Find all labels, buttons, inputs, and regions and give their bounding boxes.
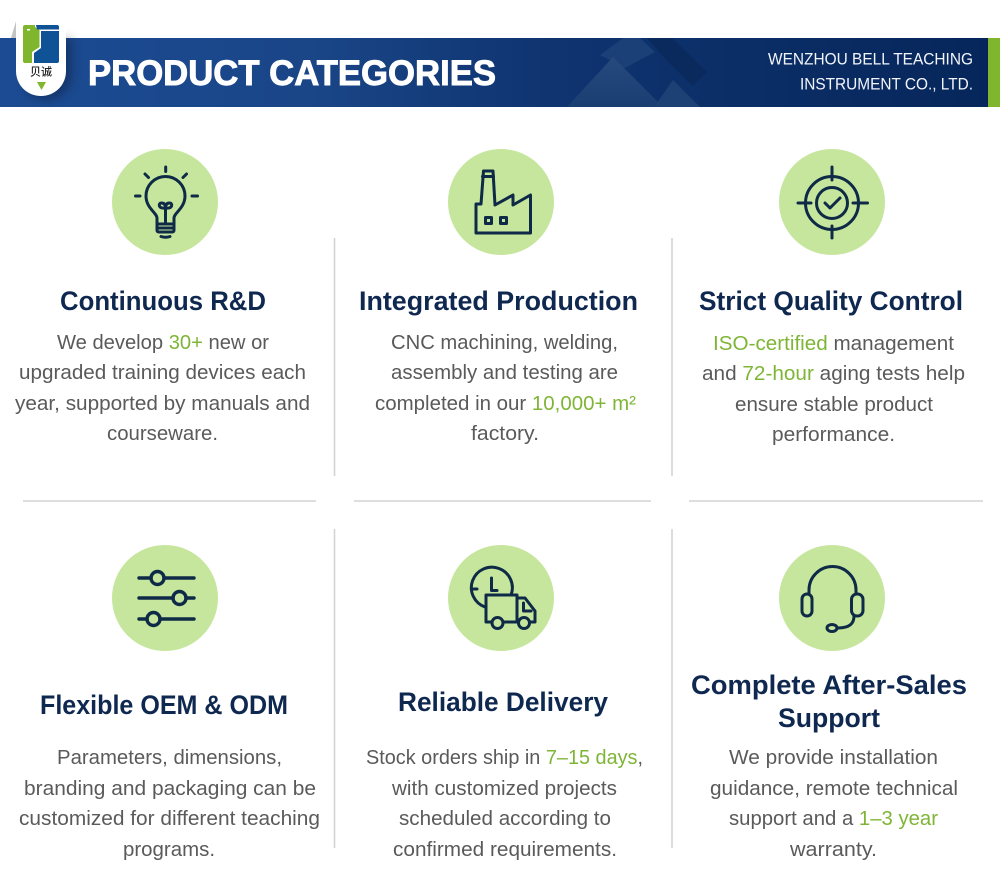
header banner <box>0 38 1000 107</box>
heading: Support <box>778 703 880 733</box>
company name: WENZHOU BELL TEACHING <box>768 50 973 68</box>
heading: Reliable Delivery <box>398 687 608 717</box>
description: programs. <box>123 838 215 861</box>
description <box>15 331 310 445</box>
description: customized for different teaching <box>19 807 320 830</box>
heading: Complete After-Sales <box>691 670 967 700</box>
icon: sliders <box>112 545 218 651</box>
description <box>710 746 958 861</box>
icon: light bulb <box>112 149 218 255</box>
company name <box>768 50 973 94</box>
description: factory. <box>471 422 539 445</box>
accent bar <box>988 38 1000 107</box>
icon: headset <box>779 545 885 651</box>
panel: Continuous R&D <box>15 149 310 445</box>
description: ISO-certified management <box>713 332 954 355</box>
description <box>19 746 320 861</box>
description: confirmed requirements. <box>393 838 617 861</box>
description: courseware. <box>107 422 218 445</box>
description <box>375 331 636 445</box>
description: warranty. <box>789 838 877 861</box>
description: support and a 1–3 year <box>729 807 938 830</box>
description: Stock orders ship in 7–15 days, <box>366 746 643 769</box>
description: ensure stable product <box>735 393 933 416</box>
heading: Flexible OEM & ODM <box>40 690 288 720</box>
panel: Flexible OEM & ODM <box>19 545 320 861</box>
title: PRODUCT CATEGORIES <box>88 54 496 93</box>
icon: factory <box>448 149 554 255</box>
description: upgraded training devices each <box>19 361 306 384</box>
grid dividers <box>23 238 983 848</box>
description: Parameters, dimensions, <box>57 746 282 769</box>
description: CNC machining, welding, <box>391 331 618 354</box>
description: performance. <box>772 423 895 446</box>
icon: delivery truck with clock <box>448 545 554 651</box>
description: year, supported by manuals and <box>15 392 310 415</box>
description: branding and packaging can be <box>24 777 316 800</box>
panel: Strict Quality Control <box>699 149 965 446</box>
heading <box>691 670 967 733</box>
heading: Strict Quality Control <box>699 286 963 316</box>
description: assembly and testing are <box>391 361 618 384</box>
logo badge: 贝诚 <box>30 66 52 78</box>
description: We develop 30+ new or <box>57 331 269 354</box>
description: with customized projects <box>391 777 617 800</box>
panel: Integrated Production <box>359 149 638 445</box>
description: guidance, remote technical <box>710 777 958 800</box>
icon: target with check <box>779 149 885 255</box>
heading: Integrated Production <box>359 286 638 316</box>
company name: INSTRUMENT CO., LTD. <box>800 76 973 94</box>
description <box>366 746 643 861</box>
panel: Reliable Delivery <box>366 545 643 861</box>
panel: Complete After-Sales Support <box>691 545 967 861</box>
heading: Continuous R&D <box>60 286 266 316</box>
description: completed in our 10,000+ m² <box>375 392 636 415</box>
description: We provide installation <box>729 746 938 769</box>
description <box>702 332 965 446</box>
description: and 72-hour aging tests help <box>702 362 965 385</box>
logo badge <box>11 20 72 100</box>
description: scheduled according to <box>399 807 611 830</box>
decorative mountains <box>567 38 707 107</box>
